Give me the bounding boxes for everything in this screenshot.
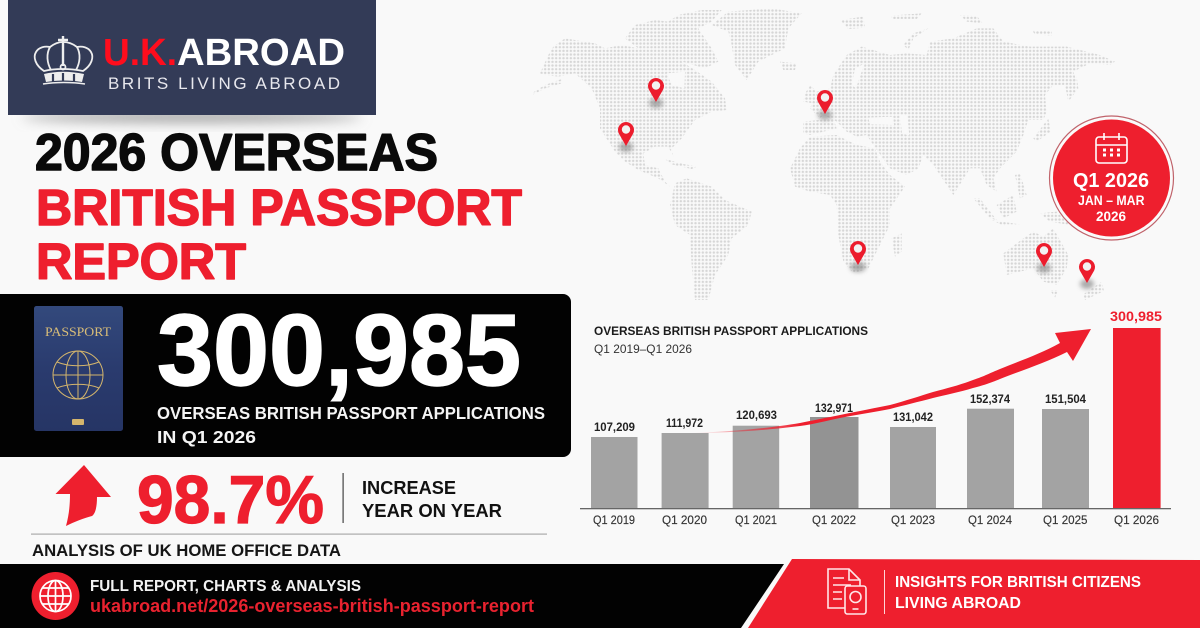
date badge xyxy=(1050,116,1174,240)
logo wordmark: U.K. xyxy=(103,32,177,74)
axis labels: Q1 2022 xyxy=(812,513,856,527)
world map xyxy=(532,8,1115,300)
stat label: INCREASE xyxy=(362,477,456,498)
icon: document and passport xyxy=(828,569,866,614)
footer tagline line 1: INSIGHTS FOR BRITISH CITIZENS xyxy=(895,574,1141,591)
figure caption line 1: OVERSEAS BRITISH PASSPORT APPLICATIONS xyxy=(157,403,545,423)
footer: black band xyxy=(0,564,784,628)
pin: new zealand xyxy=(1079,259,1095,283)
footer tagline line 2: LIVING ABROAD xyxy=(895,595,1021,612)
value labels: 152,374 xyxy=(970,392,1010,406)
growth arrow xyxy=(690,329,1091,433)
logo panel xyxy=(8,0,376,122)
stat: year on year percent: 98.7% xyxy=(137,462,324,538)
icon: passport: PASSPORT xyxy=(45,325,111,339)
title: 2026 OVERSEAS xyxy=(35,124,438,182)
chart subtitle: Q1 2019–Q1 2026 xyxy=(594,342,692,356)
icon: calendar xyxy=(1096,133,1127,163)
value labels: 107,209 xyxy=(594,420,635,434)
panel: headline figure xyxy=(0,294,571,457)
figure caption line 2: IN Q1 2026 xyxy=(157,427,256,447)
stat label: YEAR ON YEAR xyxy=(362,500,502,521)
map: europe africa asia oceania xyxy=(790,13,1115,300)
axis labels: Q1 2020 xyxy=(662,513,707,527)
logo wordmark abroad: ABROAD xyxy=(177,32,345,74)
value labels: 151,504 xyxy=(1045,392,1086,406)
axis labels: Q1 2024 xyxy=(968,513,1012,527)
source note: ANALYSIS OF UK HOME OFFICE DATA xyxy=(32,542,341,560)
badge year: 2026 xyxy=(1096,209,1126,224)
pin: mexico xyxy=(618,122,634,146)
map: americas and greenland xyxy=(532,8,802,300)
badge quarter: Q1 2026 xyxy=(1073,169,1149,192)
stat label xyxy=(362,477,502,521)
title: BRITISH PASSPORT xyxy=(36,179,522,236)
map pins xyxy=(618,78,1095,289)
axis labels: Q1 2026 xyxy=(1114,513,1159,527)
bar chart xyxy=(580,308,1171,527)
bars xyxy=(591,328,1161,509)
big number: 300,985 xyxy=(157,295,521,407)
title xyxy=(35,124,522,290)
badge months: JAN – MAR xyxy=(1078,193,1145,208)
footer: red band xyxy=(748,559,1200,628)
icon: red up arrow xyxy=(56,465,111,526)
pin: north america xyxy=(648,78,664,102)
axis labels: Q1 2021 xyxy=(735,513,777,527)
value labels: 120,693 xyxy=(736,408,777,422)
pin: australia xyxy=(1036,243,1052,267)
axis labels: Q1 2023 xyxy=(891,513,935,527)
value labels: 132,971 xyxy=(815,401,853,415)
logo tagline: BRITS LIVING ABROAD xyxy=(108,74,340,93)
value labels xyxy=(594,308,1162,434)
title: REPORT xyxy=(36,233,246,290)
chart title: OVERSEAS BRITISH PASSPORT APPLICATIONS xyxy=(594,324,868,338)
icon: passport xyxy=(34,306,123,431)
axis labels xyxy=(593,513,1159,527)
value labels: 300,985 xyxy=(1110,308,1162,324)
value labels: 111,972 xyxy=(666,416,703,430)
pin: europe xyxy=(817,90,833,114)
axis labels: Q1 2025 xyxy=(1043,513,1088,527)
pin: south africa xyxy=(850,241,866,265)
footer label: FULL REPORT, CHARTS & ANALYSIS xyxy=(90,578,361,595)
axis labels: Q1 2019 xyxy=(593,513,635,527)
footer url: ukabroad.net/2026-overseas-british-passport-report xyxy=(90,596,534,616)
icon: globe xyxy=(32,572,80,620)
value labels: 131,042 xyxy=(893,410,933,424)
icon: crown xyxy=(35,36,92,84)
